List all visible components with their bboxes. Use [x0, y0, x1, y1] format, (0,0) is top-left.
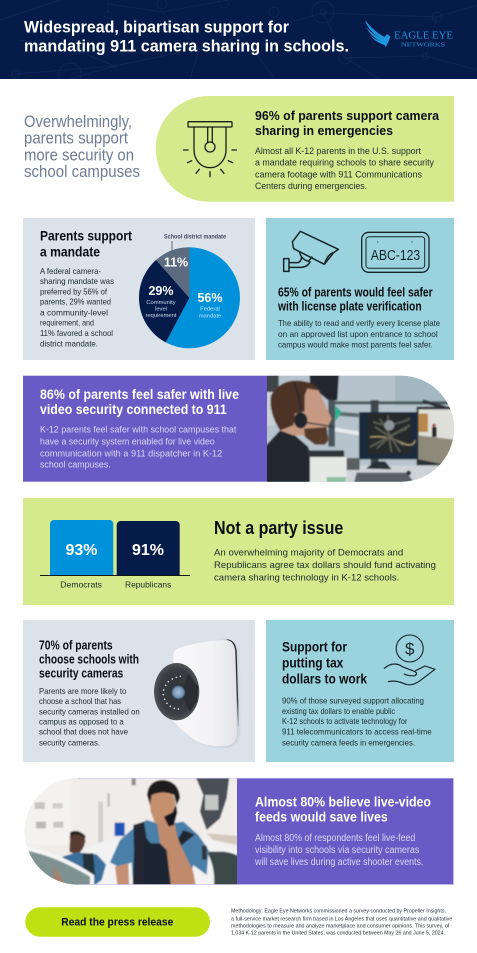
icon: license plate: ABC-123: [371, 247, 420, 264]
icon: coin over hand: [384, 635, 435, 685]
pie chart: mandate: [199, 313, 221, 319]
heading: choose schools with: [39, 652, 139, 666]
side statement: Overwhelmingly,: [24, 112, 132, 131]
heading: 65% of parents would feel safer: [278, 286, 433, 300]
side statement: school campuses: [24, 162, 140, 181]
methodology note: [231, 908, 452, 937]
heading: Parents support: [40, 228, 132, 244]
bar chart: Democrats vs Republicans: 91%: [132, 542, 164, 559]
pie chart: 11%: [164, 256, 188, 270]
heading: a mandate: [40, 244, 100, 260]
body text: [254, 833, 423, 868]
body text: security cameras installed on: [39, 706, 140, 716]
pie chart: [139, 235, 240, 348]
panel: 70% choose schools with cameras: [23, 620, 255, 762]
body text: [39, 686, 140, 747]
bar chart: Democrats vs Republicans: Democrats: [60, 580, 102, 590]
body text: on an approved list upon entrance to school: [278, 329, 438, 339]
side statement: more security on: [24, 146, 134, 164]
panel: 96% of parents: [156, 96, 454, 202]
icon: coin over hand: $: [405, 640, 415, 658]
body text: [282, 696, 432, 748]
body text: 90% of those surveyed support allocating: [282, 696, 424, 706]
panel: 86% live video security: [23, 376, 454, 482]
title: Widespread, bipartisan support for: [24, 18, 289, 37]
heading: 70% of parents: [39, 638, 113, 652]
panel: license plate verification: [266, 218, 454, 360]
body text: Almost 80% of respondents feel live-feed: [255, 833, 415, 844]
photo: police officer with radio: [24, 778, 237, 885]
body text: campus as opposed to a: [39, 716, 124, 726]
body text: Republicans agree tax dollars should fund activating: [214, 560, 436, 571]
heading: video security connected to 911: [40, 402, 227, 417]
body text: security cameras.: [39, 737, 100, 747]
body text: The ability to read and verify every license plate: [278, 318, 440, 328]
title: mandating 911 camera sharing in schools.: [24, 37, 349, 56]
heading: [277, 286, 433, 314]
bar chart: Democrats vs Republicans: [40, 520, 190, 590]
pie chart: 29%: [148, 284, 174, 298]
logo: Eagle Eye Networks: [365, 20, 453, 48]
heading: Support for: [282, 639, 347, 655]
body text: school campuses.: [40, 460, 111, 470]
body text: security camera feeds in emergencies.: [282, 738, 415, 748]
body text: school that does not have: [39, 727, 128, 737]
photo: dispatcher at monitors: [267, 376, 454, 482]
body text: preferred by 56% of: [40, 287, 108, 297]
heading: 96% of parents support camera: [255, 109, 440, 123]
network background pattern: [0, 0, 477, 85]
heading: sharing in emergencies: [255, 124, 393, 138]
body text: communication with a 911 dispatcher in K-12: [40, 449, 222, 459]
header banner: [0, 0, 477, 85]
pie chart: Community: [146, 300, 176, 306]
body text: will save lives during active shooter events.: [254, 857, 423, 868]
button: read the press release: [25, 907, 210, 937]
heading: putting tax: [282, 655, 343, 671]
methodology note: a full-service market research firm based in Los Angeles that uses quantitative and qualitative: [231, 916, 452, 922]
body text: a mandate requiring schools to share security: [255, 158, 434, 168]
icon: dome camera: [184, 122, 236, 177]
heading: [40, 228, 132, 260]
pie chart: level: [155, 307, 167, 313]
panel: not a party issue: [23, 498, 454, 605]
body text: K-12 schools to activate technology for: [282, 716, 407, 726]
heading: [39, 638, 139, 681]
body text: sharing mandate was: [40, 276, 114, 286]
heading: with license plate verification: [277, 300, 422, 314]
pie chart: 56%: [197, 291, 223, 305]
photo: white dome security camera: [154, 640, 239, 747]
body text: Parents are more likely to: [39, 686, 127, 696]
heading: 86% of parents feel safer with live: [40, 387, 239, 402]
body text: 911 telecommunicators to access real-time: [282, 727, 432, 737]
body text: requirement, and: [40, 318, 94, 328]
pie chart: Federal: [200, 307, 220, 313]
pie chart: requirement: [146, 313, 177, 319]
body text: Centers during emergencies.: [255, 181, 367, 191]
body text: 11% favored a school: [40, 328, 113, 338]
body text: have a security system enabled for live video: [40, 437, 215, 447]
body text: [255, 146, 434, 191]
body text: a community-level: [40, 307, 108, 317]
body text: K-12 parents feel safer with school campuses that: [40, 425, 237, 435]
side statement: parents support: [24, 128, 128, 148]
heading: [255, 109, 440, 138]
logo: Eagle Eye Networks: EAGLE EYE: [394, 30, 453, 42]
bar chart: Democrats vs Republicans: Republicans: [125, 580, 171, 590]
methodology note: Methodology: Eagle Eye Networks commissioned a survey conducted by Propeller Insights,: [231, 908, 446, 914]
logo: Eagle Eye Networks: NETWORKS: [401, 42, 445, 48]
title: [24, 18, 349, 56]
body text: district mandate.: [40, 338, 98, 348]
methodology note: 1,034 K-12 parents in the United States, was conducted between May 26 and June 5, 2024.: [231, 931, 445, 937]
button: read the press release: Read the press release: [61, 917, 173, 929]
heading: [255, 794, 431, 825]
methodology note: methodologies to measure and analyze marketplace and consumer opinions. This survey, of: [231, 923, 450, 929]
heading: [40, 387, 239, 417]
body text: existing tax dollars to enable public: [282, 706, 396, 716]
body text: choose a school that has: [39, 696, 121, 706]
body text: [214, 548, 436, 584]
panel outline: [78, 778, 454, 884]
pie chart: School district mandate: [164, 235, 227, 241]
body text: camera sharing technology in K-12 schools.: [214, 573, 399, 584]
icon: license plate: [362, 232, 429, 272]
heading: Almost 80% believe live-video: [255, 794, 431, 810]
side statement: [24, 112, 140, 181]
body text: campus would make most parents feel safer.: [278, 340, 433, 350]
body text: camera footage with 911 Communications: [255, 170, 422, 180]
body text: [40, 425, 237, 470]
heading: dollars to work: [282, 671, 367, 687]
heading: security cameras: [39, 667, 123, 681]
body text: An overwhelming majority of Democrats and: [214, 548, 403, 559]
body text: [278, 318, 440, 350]
bar chart: Democrats vs Republicans: 93%: [65, 542, 98, 559]
heading: feeds would save lives: [255, 809, 388, 825]
panel: parents support a mandate: [23, 218, 255, 360]
icon: security camera: [284, 231, 338, 271]
body text: [40, 266, 114, 348]
body text: parents, 29% wanted: [40, 297, 111, 307]
body text: visibility into schools via security cameras: [255, 845, 419, 856]
heading: [282, 639, 367, 687]
body text: A federal camera-: [40, 266, 101, 276]
panel: tax dollars: [266, 620, 454, 762]
body text: Almost all K-12 parents in the U.S. support: [255, 146, 421, 156]
panel: almost 80% believe: [24, 778, 454, 885]
heading: Not a party issue: [214, 518, 343, 538]
